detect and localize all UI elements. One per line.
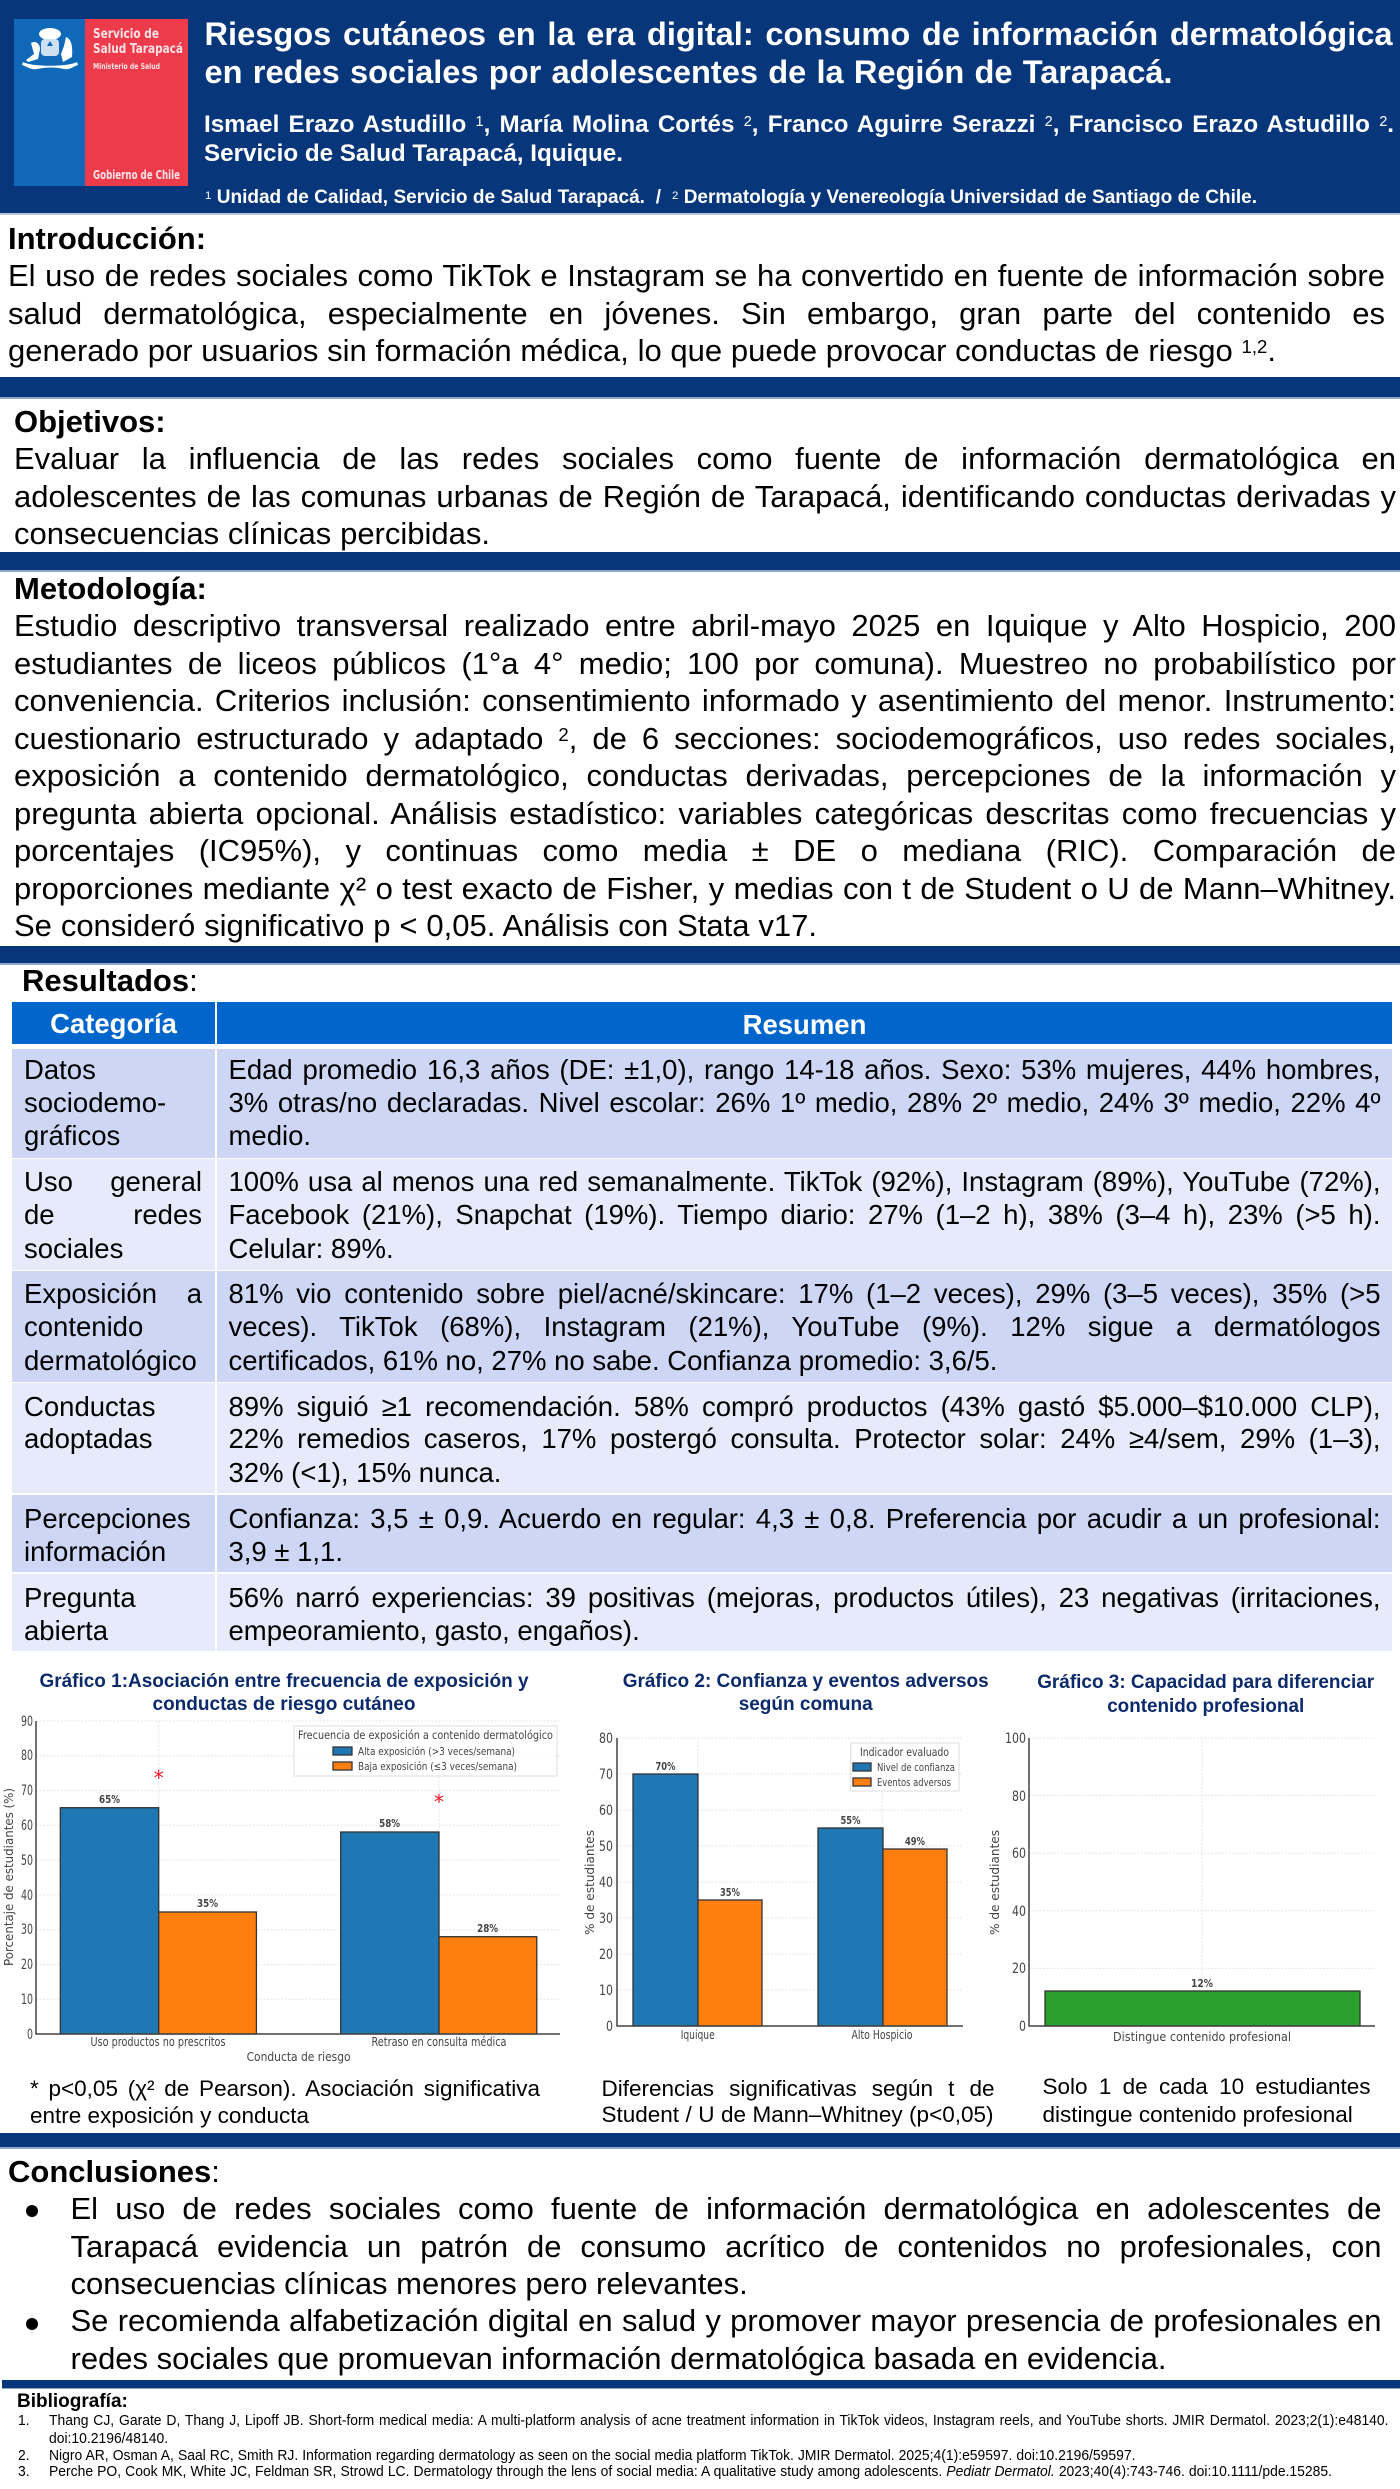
caption: gráfico 1: * p<0,05 (χ² de Pearson). Asociación significativa [30,2076,540,2101]
value labels: 28% [477,1923,498,1935]
row: exposición a contenido dermatológico: contenido [24,1311,143,1342]
row: pregunta abierta: abierta [24,1615,108,1646]
x axis labels: Alto Hospicio [852,2028,912,2042]
y axis ticks: 40 [21,1888,33,1904]
y axis label: % de estudiantes [583,1830,597,1935]
chart title: gráfico 1: Gráfico 1:Asociación entre frecuencia de exposición y [40,1671,529,1692]
bullet: uso acrítico: consecuencias clínicas menores pero relevantes. [70,2266,748,2301]
caption: gráfico 3: distingue contenido profesional [1042,2102,1353,2127]
y axis ticks [21,1714,33,2043]
text block: metodología: pregunta abierta opcional. Análisis estadístico: variables categóricas descritas como frecuencias y [14,796,1396,831]
reference list [18,2412,1389,2480]
row: conductas adoptadas: adoptadas [24,1423,152,1454]
legend [294,1726,557,1776]
results table [12,1002,1392,1651]
y axis ticks: 60 [21,1818,33,1834]
legend: Eventos adversos [877,1776,951,1789]
y axis ticks: 10 [21,1992,33,2008]
y axis ticks: 40 [1012,1904,1026,1920]
y axis ticks: 20 [599,1947,613,1963]
text block: introducción: El uso de redes sociales como TikTok e Instagram se ha convertido en fuente de información sobre [8,258,1385,293]
text block: metodología: estudiantes de liceos públicos (1°a 4° medio; 100 por comuna). Muestreo no probabilístico por [14,646,1396,681]
row: exposición a contenido dermatológico: Exposición a [24,1278,202,1309]
y axis ticks: 0 [606,2019,613,2035]
y axis ticks [1005,1731,1026,2035]
significance stars: * [154,1766,164,1790]
text block: objetivos: consecuencias clínicas percibidas. [14,516,490,551]
legend: Nivel de confianza [877,1761,955,1774]
y axis label: % de estudiantes [988,1830,1002,1935]
caption: gráfico 2: Student / U de Mann–Whitney (p<0,05) [602,2102,994,2127]
caption: gráfico 2 [602,2076,994,2127]
row: percepciones información [12,1495,1392,1572]
x axis labels: Conducta de riesgo [247,2050,351,2064]
panel: conclusiones [8,2154,1382,2376]
significance stars [154,1766,444,1814]
y axis ticks: 70 [21,1783,33,1799]
row: datos sociodemográficos [12,1049,1392,1158]
heading: objetivos: Objetivos: [14,404,166,439]
reference list: doi:10.2196/48140. [49,2430,168,2447]
bullet: alfabetización digital: redes sociales que promuevan información dermatológica basada en evidencia. [70,2341,1166,2376]
row: uso general de redes sociales: sociales [24,1233,123,1264]
x axis labels: Uso productos no prescritos [90,2035,226,2049]
row: uso general de redes sociales: Uso general [24,1166,202,1197]
chart title: gráfico 1 [40,1671,529,1715]
caption: gráfico 3 [1042,2074,1370,2127]
y axis ticks: 10 [599,1983,613,1999]
row: exposición a contenido dermatológico [12,1271,1392,1382]
bar chart: confianza y eventos adversos [583,1731,963,2042]
panel: bibliografía [17,2391,1389,2480]
legend: Baja exposición (≤3 veces/semana) [358,1760,517,1773]
row: datos sociodemográficos: medio. [228,1120,311,1151]
reference list: Nigro AR, Osman A, Saal RC, Smith RJ. Information regarding dermatology as seen on the social media platform TikTok. JMIR Dermatol. 2025;4(1):e59597. doi:10.2196/59597. [49,2447,1135,2464]
y axis ticks [599,1731,613,2035]
bullet: uso acrítico: El uso de redes sociales como fuente de información dermatológica en adolescentes de [70,2191,1382,2226]
y axis ticks: 20 [1012,1961,1026,1977]
y axis ticks: 0 [1019,2019,1026,2035]
logo: Servicio de Salud Tarapacá [14,19,188,186]
chart title: gráfico 1: conductas de riesgo cutáneo [152,1694,416,1715]
text block: objetivos [14,441,1396,551]
panel: gráfico 3 [988,1672,1375,2127]
heading: bibliografía: Bibliografía: [17,2391,128,2412]
text block: metodología: porcentajes (IC95%), y continuas como media ± DE o mediana (RIC). Comparación de [14,833,1396,868]
row: uso general de redes sociales [12,1159,1392,1270]
row: pregunta abierta [12,1574,1392,1651]
text block: metodología: conveniencia. Criterios inclusión: consentimiento informado y asentimiento del menor. Instrumento: [14,683,1396,718]
title: en redes sociales por adolescentes de la Región de Tarapacá. [204,53,1172,90]
table header [12,1002,1392,1044]
chart title: gráfico 2: según comuna [739,1694,873,1715]
title [204,15,1393,90]
y axis ticks: 40 [599,1875,613,1891]
legend [851,1743,959,1791]
text block: objetivos: Evaluar la influencia de las redes sociales como fuente de información dermatológica en [14,441,1396,476]
table header: Categoría [50,1008,177,1039]
y axis ticks: 30 [599,1911,613,1927]
bars: alta y baja exposición [60,1808,537,2034]
row: datos sociodemográficos: Datos [24,1054,96,1085]
legend: Alta exposición (>3 veces/semana) [358,1745,515,1758]
caption: gráfico 2: Diferencias significativas según t de [602,2076,994,2101]
value labels: 55% [840,1815,861,1827]
row: uso general de redes sociales: de redes [24,1199,202,1230]
significance stars: * [434,1790,444,1814]
row: datos sociodemográficos: gráficos [24,1120,120,1151]
bar chart: distingue contenido profesional [988,1731,1375,2044]
x axis labels: Retraso en consulta médica [372,2035,506,2049]
value labels [656,1761,925,1899]
value label: 12% [1191,1978,1213,1990]
chart title: gráfico 2 [623,1671,989,1715]
text block: metodología: proporciones mediante χ² o test exacto de Fisher, y medias con t de Student o U de Mann–Whitney. [14,871,1396,906]
panel: gráfico 2 [583,1671,994,2127]
text block: introducción: generado por usuarios sin formación médica, lo que puede provocar conductas de riesgo 1,2. [8,333,1276,368]
bullet: alfabetización digital [26,2303,1382,2376]
y axis ticks: 50 [599,1839,613,1855]
heading: conclusiones: Conclusiones: [8,2154,220,2189]
y axis ticks: 80 [21,1748,33,1764]
bar: 12% [1045,1991,1360,2026]
chart title: gráfico 2: Gráfico 2: Confianza y eventos adversos [623,1671,989,1692]
row: conductas adoptadas: 32% (<1), 15% nunca. [228,1457,501,1488]
row: percepciones información: información [24,1536,166,1567]
logo: Servicio de Salud Tarapacá: Ministerio de Salud [93,62,160,71]
text block: objetivos: adolescentes de las comunas urbanas de Región de Tarapacá, identificando conductas derivadas y [14,479,1396,514]
caption: gráfico 1 [30,2076,540,2128]
heading: introducción: Introducción: [8,221,206,256]
x axis labels: Iquique [681,2028,715,2042]
row: exposición a contenido dermatológico: veces). TikTok (68%), Instagram (21%), YouTube (9%). 12% sigue a dermatólogos [228,1311,1380,1342]
text block: introducción [8,258,1385,368]
reference list: 2. [18,2447,30,2464]
y axis ticks: 50 [21,1853,33,1869]
text block: metodología: exposición a contenido dermatológico, conductas derivadas, percepciones de la información y [14,758,1396,793]
row: pregunta abierta: 56% narró experiencias: 39 positivas (mejoras, productos útiles), 23 negativas (irritaciones, [228,1582,1380,1613]
row: uso general de redes sociales: Celular: 89%. [228,1233,394,1264]
panel: gráfico 1 [2,1671,560,2128]
logo: Servicio de Salud Tarapacá: Servicio de [93,27,159,42]
value labels: 65% [99,1794,120,1806]
row: datos sociodemográficos: sociodemo- [24,1087,166,1118]
affiliations: 1 Unidad de Calidad, Servicio de Salud Tarapacá. / 2 Dermatología y Venereología Universidad de Santiago de Chile. [205,187,1257,208]
bar chart: exposición y conductas [2,1715,560,2064]
row: pregunta abierta: Pregunta [24,1582,136,1613]
panel: introducción [8,221,1385,368]
bullet: alfabetización digital: Se recomienda alfabetización digital en salud y promover mayor presencia de profesionales en [70,2303,1382,2338]
bullet: uso acrítico: Tarapacá evidencia un patrón de consumo acrítico de contenidos no profesionales, con [70,2229,1382,2264]
row: exposición a contenido dermatológico: certificados, 61% no, 27% no sabe. Confianza promedio: 3,6/5. [228,1345,997,1376]
bars: Iquique y Alto Hospicio [633,1774,947,2026]
y axis ticks: 70 [599,1767,613,1783]
heading: metodología: Metodología: [14,571,207,606]
row: percepciones información: 3,9 ± 1,1. [228,1536,343,1567]
header banner [0,0,1400,215]
text block: introducción: salud dermatológica, especialmente en jóvenes. Sin embargo, gran parte del contenido es [8,296,1385,331]
chart title: gráfico 3: contenido profesional [1107,1696,1304,1717]
reference list: Perche PO, Cook MK, White JC, Feldman SR, Strowd LC. Dermatology through the lens of social media: A qualitative study among adolescents. Pediatr Dermatol. 2023;40(4):743-746. doi:10.1111/pde.15285. [49,2463,1332,2480]
y axis ticks: 60 [599,1803,613,1819]
value labels [99,1794,498,1935]
title: Riesgos cutáneos en la era digital: consumo de información dermatológica [204,15,1392,52]
row: percepciones información: Confianza: 3,5 ± 0,9. Acuerdo en regular: 4,3 ± 0,8. Preferencia por acudir a un profesional: [228,1503,1380,1534]
y axis ticks: 100 [1005,1731,1026,1747]
text block: metodología: Estudio descriptivo transversal realizado entre abril-mayo 2025 en Iquique y Alto Hospicio, 200 [14,608,1396,643]
reference list: 3. [18,2463,30,2480]
y axis ticks: 20 [21,1957,33,1973]
row: exposición a contenido dermatológico: 81% vio contenido sobre piel/acné/skincare: 17% (1–2 veces), 29% (3–5 veces), 35% (>5 [228,1278,1380,1309]
table header: Resumen [743,1009,866,1040]
y axis label: Porcentaje de estudiantes (%) [2,1788,16,1966]
y axis ticks: 80 [599,1731,613,1747]
row: pregunta abierta: empeoramiento, gasto, engaños). [228,1615,640,1646]
text block: metodología [14,608,1396,943]
value labels: 35% [720,1887,740,1899]
row: conductas adoptadas: 22% remedios caseros, 17% postergó consulta. Protector solar: 24% ≥4/sem, 29% (1–3), [228,1423,1380,1454]
row: conductas adoptadas: Conductas [24,1391,155,1422]
bullet: uso acrítico [26,2191,1382,2301]
authors [204,111,1394,167]
text block: metodología: cuestionario estructurado y adaptado 2, de 6 secciones: sociodemográficos, uso redes sociales, [14,721,1396,756]
icon: coat of arms [22,28,78,69]
row: uso general de redes sociales: Facebook (21%), Snapchat (19%). Tiempo diario: 27% (1–2 h), 38% (3–4 h), 23% (>5 h). [228,1199,1380,1230]
value labels: 35% [197,1898,218,1910]
value labels: 70% [656,1761,676,1773]
heading: resultados: Resultados: [22,963,198,998]
row: datos sociodemográficos: Edad promedio 16,3 años (DE: ±1,0), rango 14-18 años. Sexo: 53% mujeres, 44% hombres, [228,1054,1380,1085]
y axis ticks: 0 [27,2027,33,2043]
chart title: gráfico 3: Gráfico 3: Capacidad para diferenciar [1037,1672,1375,1693]
caption: gráfico 3: Solo 1 de cada 10 estudiantes [1042,2074,1370,2099]
row: percepciones información: Percepciones [24,1503,191,1534]
y axis ticks: 60 [1012,1846,1026,1862]
panel: objetivos [14,404,1396,551]
row: conductas adoptadas [12,1383,1392,1493]
x axis labels [681,2028,912,2042]
row: uso general de redes sociales: 100% usa al menos una red semanalmente. TikTok (92%), Instagram (89%), YouTube (72%), [228,1166,1380,1197]
x axis labels [90,2035,506,2064]
row: conductas adoptadas: 89% siguió ≥1 recomendación. 58% compró productos (43% gastó $5.000–$10.000 CLP), [228,1391,1380,1422]
chart title: gráfico 3 [1037,1672,1375,1717]
caption: gráfico 1: entre exposición y conducta [30,2103,309,2128]
reference list: 1. [18,2412,30,2429]
value labels: 58% [379,1818,400,1830]
row: datos sociodemográficos: 3% otras/no declaradas. Nivel escolar: 26% 1º medio, 28% 2º medio, 24% 3º medio, 22% 4º [228,1087,1380,1118]
value labels: 49% [905,1836,925,1848]
authors: Servicio de Salud Tarapacá, Iquique. [204,140,623,167]
authors: Ismael Erazo Astudillo 1, María Molina Cortés 2, Franco Aguirre Serazzi 2, Francisco Erazo Astudillo 2. [204,111,1394,138]
y axis ticks: 30 [21,1922,33,1938]
legend: Indicador evaluado [860,1745,949,1759]
y axis ticks: 80 [1012,1789,1026,1805]
x axis label: Distingue contenido profesional [1113,2030,1291,2044]
text block: metodología: Se consideró significativo p < 0,05. Análisis con Stata v17. [14,908,817,943]
panel: metodología [14,571,1396,943]
reference list: Thang CJ, Garate D, Thang J, Lipoff JB. Short-form medical media: A multi-platform analysis of acne treatment information in TikTok videos, Instagram reels, and YouTube shorts. JMIR Dermatol. 2023;2(1):e48140. [49,2412,1389,2429]
row: exposición a contenido dermatológico: dermatológico [24,1345,197,1376]
